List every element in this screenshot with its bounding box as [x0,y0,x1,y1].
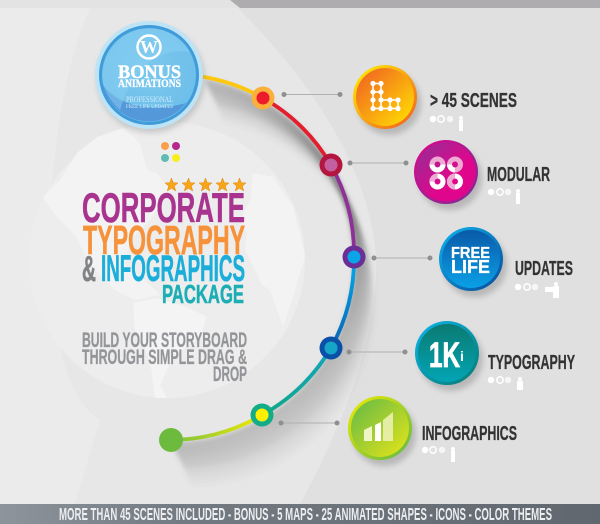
continent: africa and europe [240,173,305,327]
icon: free life: FREE [451,245,490,262]
continent: north america [43,128,170,300]
icon: modular [414,140,482,210]
label: infographics: INFOGRAPHICS [422,422,517,445]
continent: south america [133,298,207,398]
icon: 1Ki: 1K [429,336,460,375]
title: PACKAGE [162,279,244,309]
title: CORPORATE [82,184,245,231]
pictogram: typography [488,377,523,390]
four colour dots [161,142,180,162]
arc shadow [172,81,373,483]
icon: 1Ki [415,321,483,391]
top bar [0,0,600,8]
connector: modular [348,160,408,166]
badge text: ANIMATIONS [118,78,181,90]
background left panel [0,8,100,504]
node 3 [342,246,366,268]
icon: free life [439,227,507,297]
connector: typography [346,350,408,354]
label: scenes: > 45 SCENES [430,89,517,112]
connector: updates [372,256,432,260]
title: & [82,248,96,289]
label: infographics [422,422,517,462]
node 5 [250,404,274,426]
subtitle: BUILD YOUR STORYBOARD [82,328,247,352]
subtitle: DROP [213,362,247,386]
label: scenes [430,89,517,131]
subtitle: THROUGH SIMPLE DRAG & [82,345,247,369]
pictogram: modular [488,189,520,204]
label: modular: MODULAR [487,163,550,186]
node 4 [320,336,342,360]
world map globe [29,122,305,398]
icon: free life: LIFE [451,257,490,277]
subtitle [82,328,247,386]
pictogram: updates [515,282,559,298]
badge text [118,62,181,110]
title [82,184,245,309]
pictogram: infographics [422,447,455,462]
label: modular [487,163,550,204]
background light panel [0,8,376,504]
icon: scenes [353,65,421,135]
badge text: BONUS [118,62,181,83]
timeline arc [171,77,354,440]
title: TYPOGRAPHY [83,217,245,263]
label: typography [488,351,575,390]
node 1 [252,86,274,110]
end node [159,428,183,452]
label: updates [515,257,573,298]
badge text: FREE LIFE UPDATES [126,104,173,110]
connector: scenes [282,92,342,97]
star rating [165,178,246,191]
title: INFOGRAPHICS [101,248,245,289]
pictogram: scenes [430,116,463,131]
icon: 1Ki: i [460,348,464,364]
node 2 [320,154,342,176]
icon: infographics [348,396,416,466]
connector: infographics [278,420,340,426]
icon: wordpress: W [140,37,158,57]
badge: bonus animations [95,21,205,133]
badge text: PROFESSIONAL [126,95,173,104]
